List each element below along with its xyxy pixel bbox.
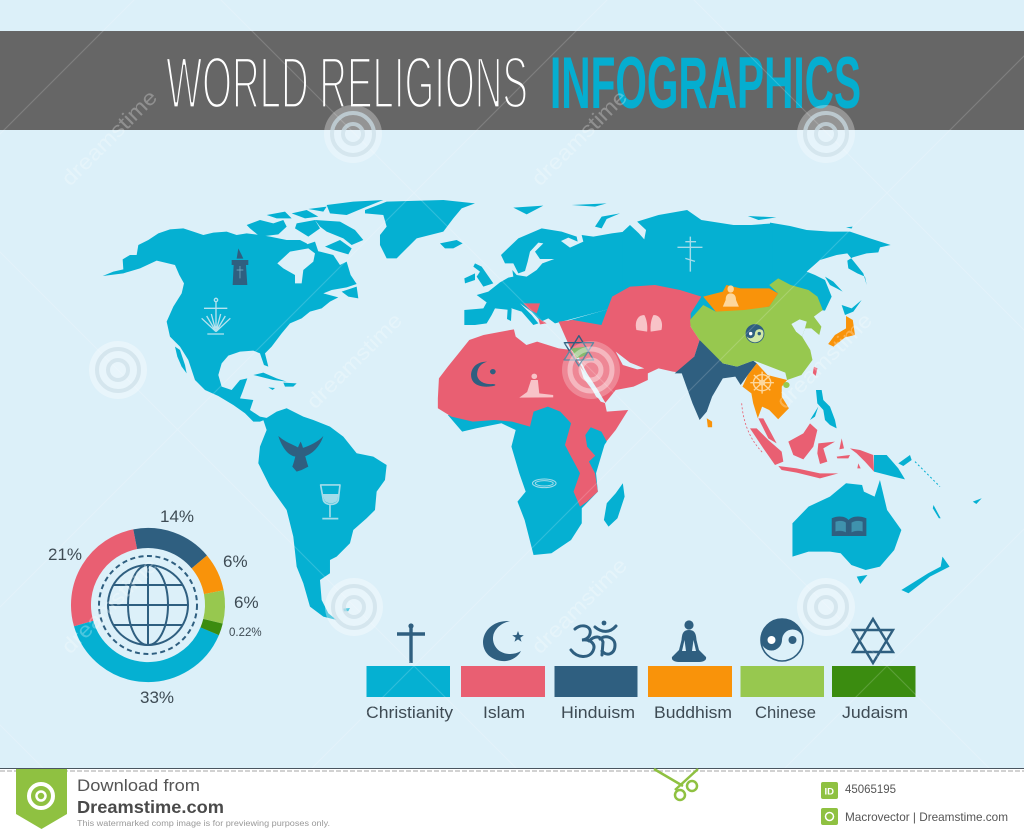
Buddhism region: Southeast Asia [742,363,789,419]
Buddhism: Sri Lanka and Japan [707,316,855,427]
Islam region: Balkans [523,303,540,313]
Madagascar [604,483,625,527]
legend: Judaism: Judaism [842,704,908,722]
title: World Religions: WORLD RELIGIONS [166,43,528,124]
Islam region: Africa [438,329,628,507]
Islam region: Middle East and Central Asia [559,285,701,403]
world map [103,200,982,620]
donut value labels: 33% [140,688,174,707]
Hudson Bay [277,248,315,283]
donut value labels: 21% [48,545,82,564]
donut value labels [48,507,262,707]
legend: Hinduism: Hinduism [561,704,635,722]
icon: crescent on map [471,362,496,387]
icon: dharma wheel [750,372,774,394]
legend: Buddhism: Buddhism [654,704,732,722]
Buddhism region: Mongolia [703,285,778,312]
watermark overlay: dreamstime [772,309,877,414]
icon: crown of thorns [532,479,556,488]
legend: Chinese [740,619,824,722]
donut value labels: 0.22% [229,627,262,639]
Yellow Sea [791,319,807,337]
Iceland [440,240,463,248]
New Zealand [901,557,950,593]
Eurasia base [559,210,773,330]
legend [366,619,916,722]
Caribbean islands [253,373,287,382]
donut value labels: 6% [223,552,248,571]
icon: star of David on map [564,336,594,366]
Islam region: Indonesia and Malaysia [742,403,874,478]
map: Eurasia, Africa and Oceania [438,210,982,593]
North America [103,228,357,422]
map: Russian Far East [770,223,891,315]
footer download text: Download from [77,777,200,795]
watermark overlay: dreamstime [57,554,162,659]
legend: Hinduism [554,621,638,722]
author credit: Macrovector | Dreamstime.com [845,810,1008,824]
icon: praying figure [519,374,553,398]
watermark overlay: dreamstime [527,554,632,659]
footer download text: Dreamstime.com [77,797,224,817]
map: Europe and Scandinavia [464,203,625,325]
Islam region: Taiwan [813,367,817,376]
donut value labels: 6% [234,593,259,612]
icon: dove [278,436,323,472]
map: Canadian Arctic and Greenland [247,200,475,298]
image ID: ID [824,786,834,798]
legend: Islam [461,621,545,722]
header band with title [0,31,1024,130]
footer download text: This watermarked comp image is for previewing purposes only. [77,819,330,828]
legend: Islam: Islam [483,704,525,722]
footer download text [77,777,330,828]
donut value labels: 14% [160,507,194,526]
icon: praying hands [636,315,662,332]
Papua New Guinea and Philippines [810,390,940,487]
watermark overlay: dreamstime [527,86,632,191]
legend: Buddhism [648,620,732,722]
icon: anchor cross [202,298,230,334]
icon: lectern [232,248,248,285]
icon: scissors [654,769,698,800]
icon: yin yang on map [746,325,764,343]
Newfoundland [342,287,358,298]
map: Southeast Asian islands [742,390,940,487]
icon: meditating figure on map [723,285,739,307]
Chinese religions region [690,278,823,380]
icon: chalice [321,485,340,519]
map: Americas [103,228,387,620]
Greenland [365,200,475,258]
footer: download strip [0,768,1024,839]
Hinduism region: India [675,340,757,420]
image ID [821,782,896,799]
icon: open book [832,516,866,536]
watermark overlay: dreamstime [302,309,407,414]
Red Sea and Persian Gulf [580,352,644,403]
legend: Judaism [832,619,916,722]
legend: Christianity: Christianity [366,704,454,722]
donut chart of religion shares [48,507,262,707]
icon: globe [99,556,197,654]
South America [258,408,387,620]
icon: orthodox cross [677,237,702,272]
Africa base [448,403,609,555]
image ID: 45065195 [845,782,896,796]
watermark overlay: dreamstime [57,86,162,191]
legend: Christianity [366,623,454,722]
Australia [792,480,901,570]
icon: green ribbon logo [16,769,67,829]
legend: Chinese: Chinese [755,704,816,722]
